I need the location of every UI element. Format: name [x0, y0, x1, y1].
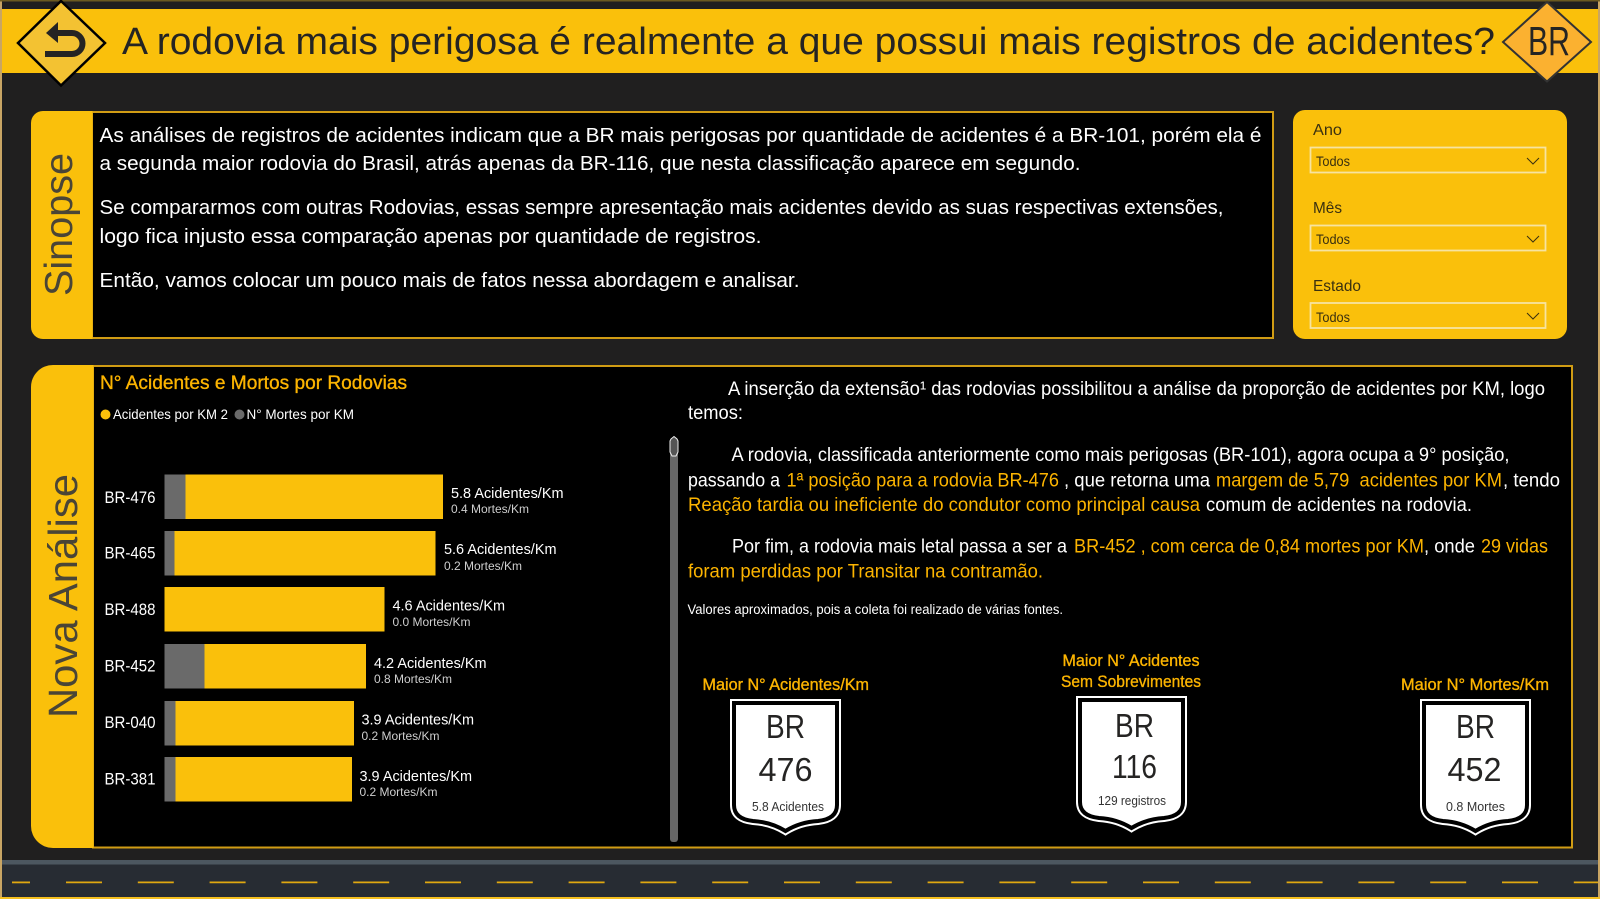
bar: BR-040 — [104, 701, 474, 746]
text block: sinopse: Então, vamos colocar um pouco mais de fatos nessa abordagem e analisar. — [100, 269, 800, 292]
badge: BR 476 — [702, 676, 869, 831]
text block: analysis: A rodovia, classificada anteriormente como mais perigosas (BR-101), agora ocupa a 9° posição, — [732, 444, 1510, 466]
bar: BR-381: BR-381 — [104, 770, 156, 788]
badge: BR 476: 476 — [758, 751, 812, 788]
panel: sinopse — [31, 111, 1273, 339]
text block: sinopse: logo fica injusto essa comparação apenas por quantidade de registros. — [100, 225, 762, 248]
text block: analysis: passando a — [688, 470, 780, 492]
text block: sinopse: Se compararmos com outras Rodovias, essas sempre apresentação mais acidentes devido as suas respectivas extensões, — [100, 196, 1224, 219]
heading: nova analise: Nova Análise — [40, 474, 86, 718]
bar chart — [104, 474, 564, 802]
footnote: Valores aproximados, pois a coleta foi realizado de várias fontes. — [688, 602, 1063, 617]
badge: BR 476: BR — [766, 708, 805, 745]
text block: sinopse: As análises de registros de acidentes indicam que a BR mais perigosas por quantidade de acidentes é a BR-101, porém ela é — [100, 124, 1262, 147]
text block: sinopse: a segunda maior rodovia do Brasil, atrás apenas da BR-116, que nesta classificação aparece em segundo. — [100, 152, 1080, 175]
filter: mes — [1310, 200, 1546, 250]
chart legend: N° Mortes por KM — [246, 406, 354, 422]
heading: sinopse: Sinopse — [38, 153, 81, 296]
badge: BR 116: 129 registros — [1098, 793, 1166, 808]
bar: BR-452: 0.8 Mortes/Km — [374, 672, 452, 686]
text block: analysis: A inserção da extensão¹ das rodovias possibilitou a análise da proporção de acidentes por KM, logo — [728, 378, 1545, 400]
bar: BR-452: 4.2 Acidentes/Km — [374, 655, 486, 672]
title: A rodovia mais perigosa é realmente a que possui mais registros de acidentes? — [122, 21, 1495, 63]
bar: BR-381: 0.2 Mortes/Km — [360, 785, 438, 799]
filter: ano: Ano — [1313, 122, 1342, 139]
text block: sinopse — [100, 124, 1262, 292]
icon: BR road sign — [1503, 2, 1591, 82]
text block: analysis: comum de acidentes na rodovia. — [1206, 494, 1472, 516]
road strip — [0, 860, 1600, 899]
bar: BR-452 — [104, 644, 486, 688]
bar: BR-465: 5.6 Acidentes/Km — [444, 541, 556, 558]
bar: BR-465: BR-465 — [104, 544, 156, 562]
text block: analysis: , tendo — [1503, 470, 1560, 492]
text block: analysis: Reação tardia ou ineficiente do condutor como principal causa — [688, 494, 1200, 516]
badge: BR 116: Maior N° Acidentes — [1062, 652, 1200, 670]
chart legend: Acidentes por KM 2 — [113, 406, 228, 422]
chart title: N° Acidentes e Mortos por Rodovias — [100, 373, 407, 394]
header band — [2, 9, 1598, 73]
text block: analysis: margem de 5,79 acidentes por KM — [1216, 470, 1502, 492]
badge: BR 116 — [1061, 652, 1201, 828]
badge: BR 452: BR — [1456, 708, 1495, 745]
icon: BR road sign: BR — [1528, 18, 1570, 64]
bar: BR-476: 5.8 Acidentes/Km — [451, 485, 564, 502]
filter: estado — [1310, 278, 1546, 328]
badge: BR 116: 116 — [1112, 748, 1157, 785]
bar: BR-488 — [104, 587, 505, 632]
chart legend — [100, 406, 354, 422]
text block: analysis: foram perdidas por Transitar na contramão. — [688, 560, 1043, 582]
bar: BR-452: BR-452 — [104, 656, 156, 676]
panel: filters — [1293, 110, 1567, 339]
bar: BR-476 — [104, 474, 564, 519]
text block: analysis: 1ª posição para a rodovia BR-476 — [786, 470, 1059, 492]
bar: BR-040: 0.2 Mortes/Km — [362, 729, 440, 743]
bar: BR-488: 4.6 Acidentes/Km — [392, 598, 505, 614]
bar: BR-488: BR-488 — [104, 600, 156, 619]
badge: BR 452: Maior N° Mortes/Km — [1401, 676, 1549, 694]
text block: analysis: 29 vidas — [1481, 536, 1548, 558]
badge: BR 452: 0.8 Mortes — [1446, 799, 1505, 814]
text block: analysis: Por fim, a rodovia mais letal passa a ser a — [732, 536, 1067, 558]
bar: BR-476: 0.4 Mortes/Km — [451, 502, 529, 516]
filter: ano — [1310, 122, 1546, 172]
bar: BR-476: BR-476 — [104, 488, 156, 507]
filter: estado: Todos — [1316, 309, 1350, 325]
filter: estado: Estado — [1313, 278, 1361, 295]
text block: analysis: temos: — [688, 402, 743, 424]
bar: BR-488: 0.0 Mortes/Km — [392, 615, 470, 629]
filter: mes: Todos — [1316, 231, 1350, 247]
bar: BR-040: 3.9 Acidentes/Km — [362, 712, 474, 728]
bar: BR-465 — [104, 531, 556, 576]
icon: back arrow road sign — [18, 1, 105, 86]
filter: mes: Mês — [1313, 200, 1342, 217]
filter: ano: Todos — [1316, 153, 1350, 169]
badge: BR 476: 5.8 Acidentes — [752, 799, 824, 814]
badge: BR 452: 452 — [1448, 751, 1502, 788]
scrollbar — [670, 436, 678, 842]
badge: BR 116: BR — [1115, 707, 1154, 744]
bar: BR-381 — [104, 757, 472, 802]
badge: BR 452 — [1401, 676, 1549, 831]
panel: nova analise — [31, 365, 1572, 848]
badge: BR 116: Sem Sobrevimentes — [1061, 673, 1201, 691]
bar: BR-465: 0.2 Mortes/Km — [444, 559, 522, 573]
badge: BR 476: Maior N° Acidentes/Km — [702, 676, 869, 694]
text block: analysis: BR-452 , com cerca de 0,84 mortes por KM — [1074, 536, 1424, 558]
text block: analysis: , onde — [1424, 536, 1475, 558]
bar: BR-381: 3.9 Acidentes/Km — [360, 768, 472, 785]
text block: analysis — [688, 378, 1560, 582]
text block: analysis: , que retorna uma — [1064, 470, 1210, 492]
bar: BR-040: BR-040 — [104, 713, 156, 732]
